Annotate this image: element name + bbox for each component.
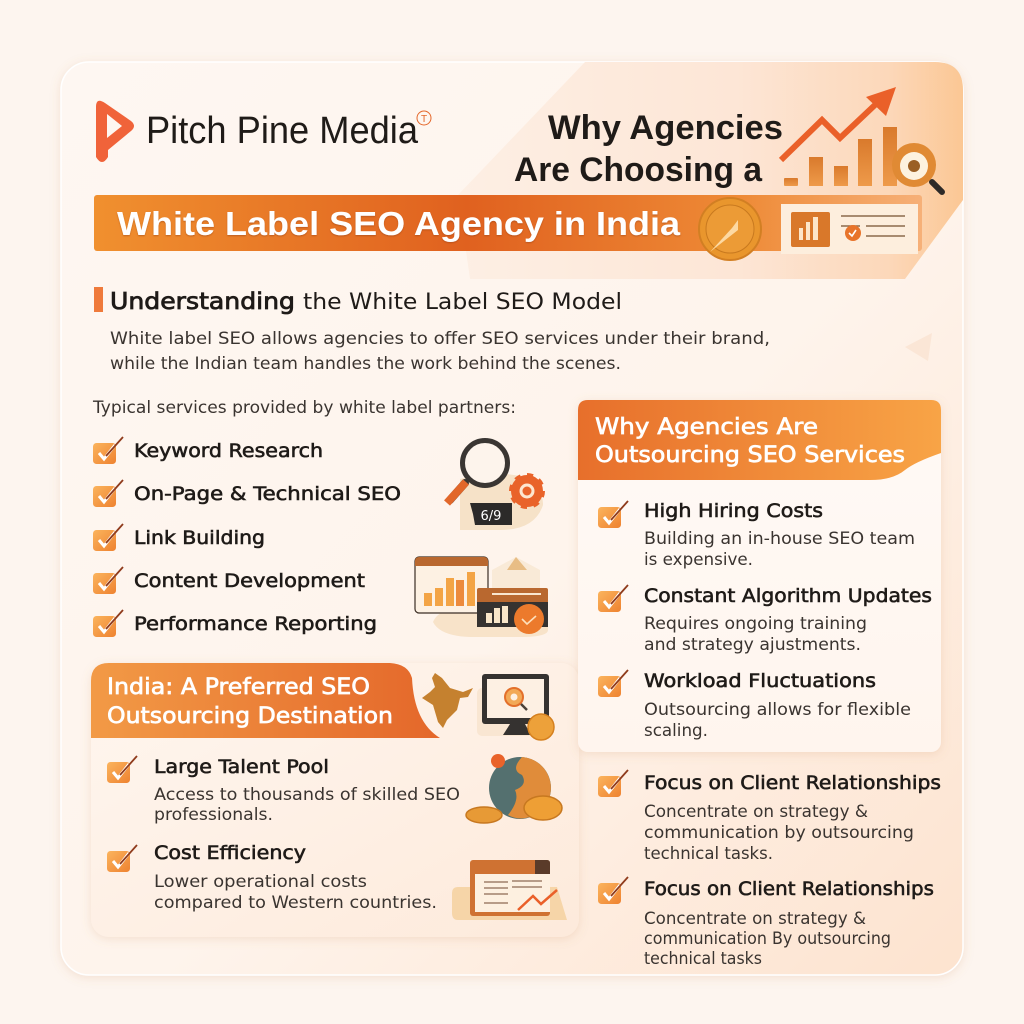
item: high hiring costs (598, 500, 915, 569)
panel header: India: A Preferred SEO (107, 674, 370, 700)
item: large talent pool: Large Talent Pool (154, 756, 329, 778)
decorative triangle (905, 333, 932, 361)
report card (781, 204, 918, 254)
banner (94, 195, 922, 260)
item: high hiring costs: Building an in-house SEO team (644, 529, 915, 548)
panel header (578, 400, 941, 480)
panel: India outsourcing destination (91, 663, 579, 937)
checklist: services: Link Building (134, 527, 265, 549)
logo wordmark: Pitch Pine Media (146, 110, 419, 152)
item: cost efficiency: Cost Efficiency (154, 842, 306, 864)
icon: growth chart with magnifier (781, 87, 942, 192)
item: cost efficiency: compared to Western countries. (154, 893, 437, 912)
logo (96, 101, 431, 162)
logo trademark (417, 111, 431, 125)
title (514, 109, 783, 189)
item: focus on client relationships: Focus on Client Relationships (644, 772, 941, 794)
checklist: services: Keyword Research (134, 440, 323, 462)
item: large talent pool: Access to thousands of skilled SEO (154, 785, 460, 804)
item: focus on client relationships repeated: communication By outsourcing (644, 929, 891, 948)
item: focus on client relationships (598, 770, 941, 863)
checklist: services: Performance Reporting (134, 613, 377, 635)
item: workload fluctuations: Workload Fluctuations (644, 670, 876, 692)
item: focus on client relationships repeated: technical tasks (644, 949, 762, 968)
icon: India map (422, 673, 473, 728)
item: high hiring costs: High Hiring Costs (644, 500, 823, 522)
logo mark (96, 101, 134, 162)
checklist: services (93, 437, 401, 637)
panel body (91, 663, 579, 937)
panel header (91, 663, 440, 738)
banner title: White Label SEO Agency in India (117, 205, 681, 242)
checklist intro: Typical services provided by white label partners: (92, 398, 516, 417)
panel header: Why Agencies Are (595, 414, 818, 440)
section heading: the White Label SEO Model (303, 290, 622, 315)
section heading (94, 287, 622, 315)
header decorative wedge (458, 62, 963, 279)
panel: why agencies are outsourcing (578, 400, 941, 752)
icon: magnifier with code and gear (447, 440, 543, 530)
item: workload fluctuations: Outsourcing allows for flexible (644, 700, 911, 719)
icon: dashboard windows (415, 557, 548, 637)
icon: magnifier with code and gear: 6/9 (481, 509, 501, 524)
item: large talent pool: professionals. (154, 805, 273, 824)
item: constant algorithm updates: Constant Algorithm Updates (644, 585, 932, 607)
title: Why Agencies (548, 109, 783, 147)
item: constant algorithm updates: and strategy ajustments. (644, 635, 861, 654)
item: constant algorithm updates: Requires ongoing training (644, 614, 867, 633)
section heading: Understanding (110, 289, 295, 315)
icon: globe and coins (466, 754, 562, 823)
card background (61, 62, 963, 975)
item: cost efficiency: Lower operational costs (154, 872, 367, 891)
item: focus on client relationships repeated: Focus on Client Relationships (644, 878, 934, 900)
intro text: while the Indian team handles the work behind the scenes. (110, 354, 621, 373)
item: focus on client relationships: technical tasks. (644, 844, 773, 863)
item: cost efficiency (107, 842, 437, 912)
icon: report with growth arrow (452, 860, 567, 920)
item: focus on client relationships: Concentrate on strategy & (644, 802, 868, 821)
item: large talent pool (107, 756, 460, 824)
icon: monitor with magnifier (477, 674, 554, 740)
title: Are Choosing a (514, 151, 763, 189)
panel body (578, 400, 941, 752)
icon: clock (699, 198, 761, 260)
item: focus on client relationships repeated (598, 877, 934, 968)
item: focus on client relationships repeated: Concentrate on strategy & (644, 909, 866, 928)
checklist: services: On-Page & Technical SEO (134, 483, 401, 505)
item: high hiring costs: is expensive. (644, 550, 753, 569)
item: constant algorithm updates (598, 585, 932, 654)
checklist: services: Content Development (134, 570, 365, 592)
panel header: Outsourcing SEO Services (595, 442, 905, 468)
panel header: Outsourcing Destination (107, 703, 393, 729)
intro text (110, 329, 770, 373)
item: workload fluctuations: scaling. (644, 721, 708, 740)
item: focus on client relationships: communication by outsourcing (644, 823, 914, 842)
logo trademark: T (421, 114, 427, 125)
intro text: White label SEO allows agencies to offer SEO services under their brand, (110, 329, 770, 348)
item: workload fluctuations (598, 670, 911, 740)
